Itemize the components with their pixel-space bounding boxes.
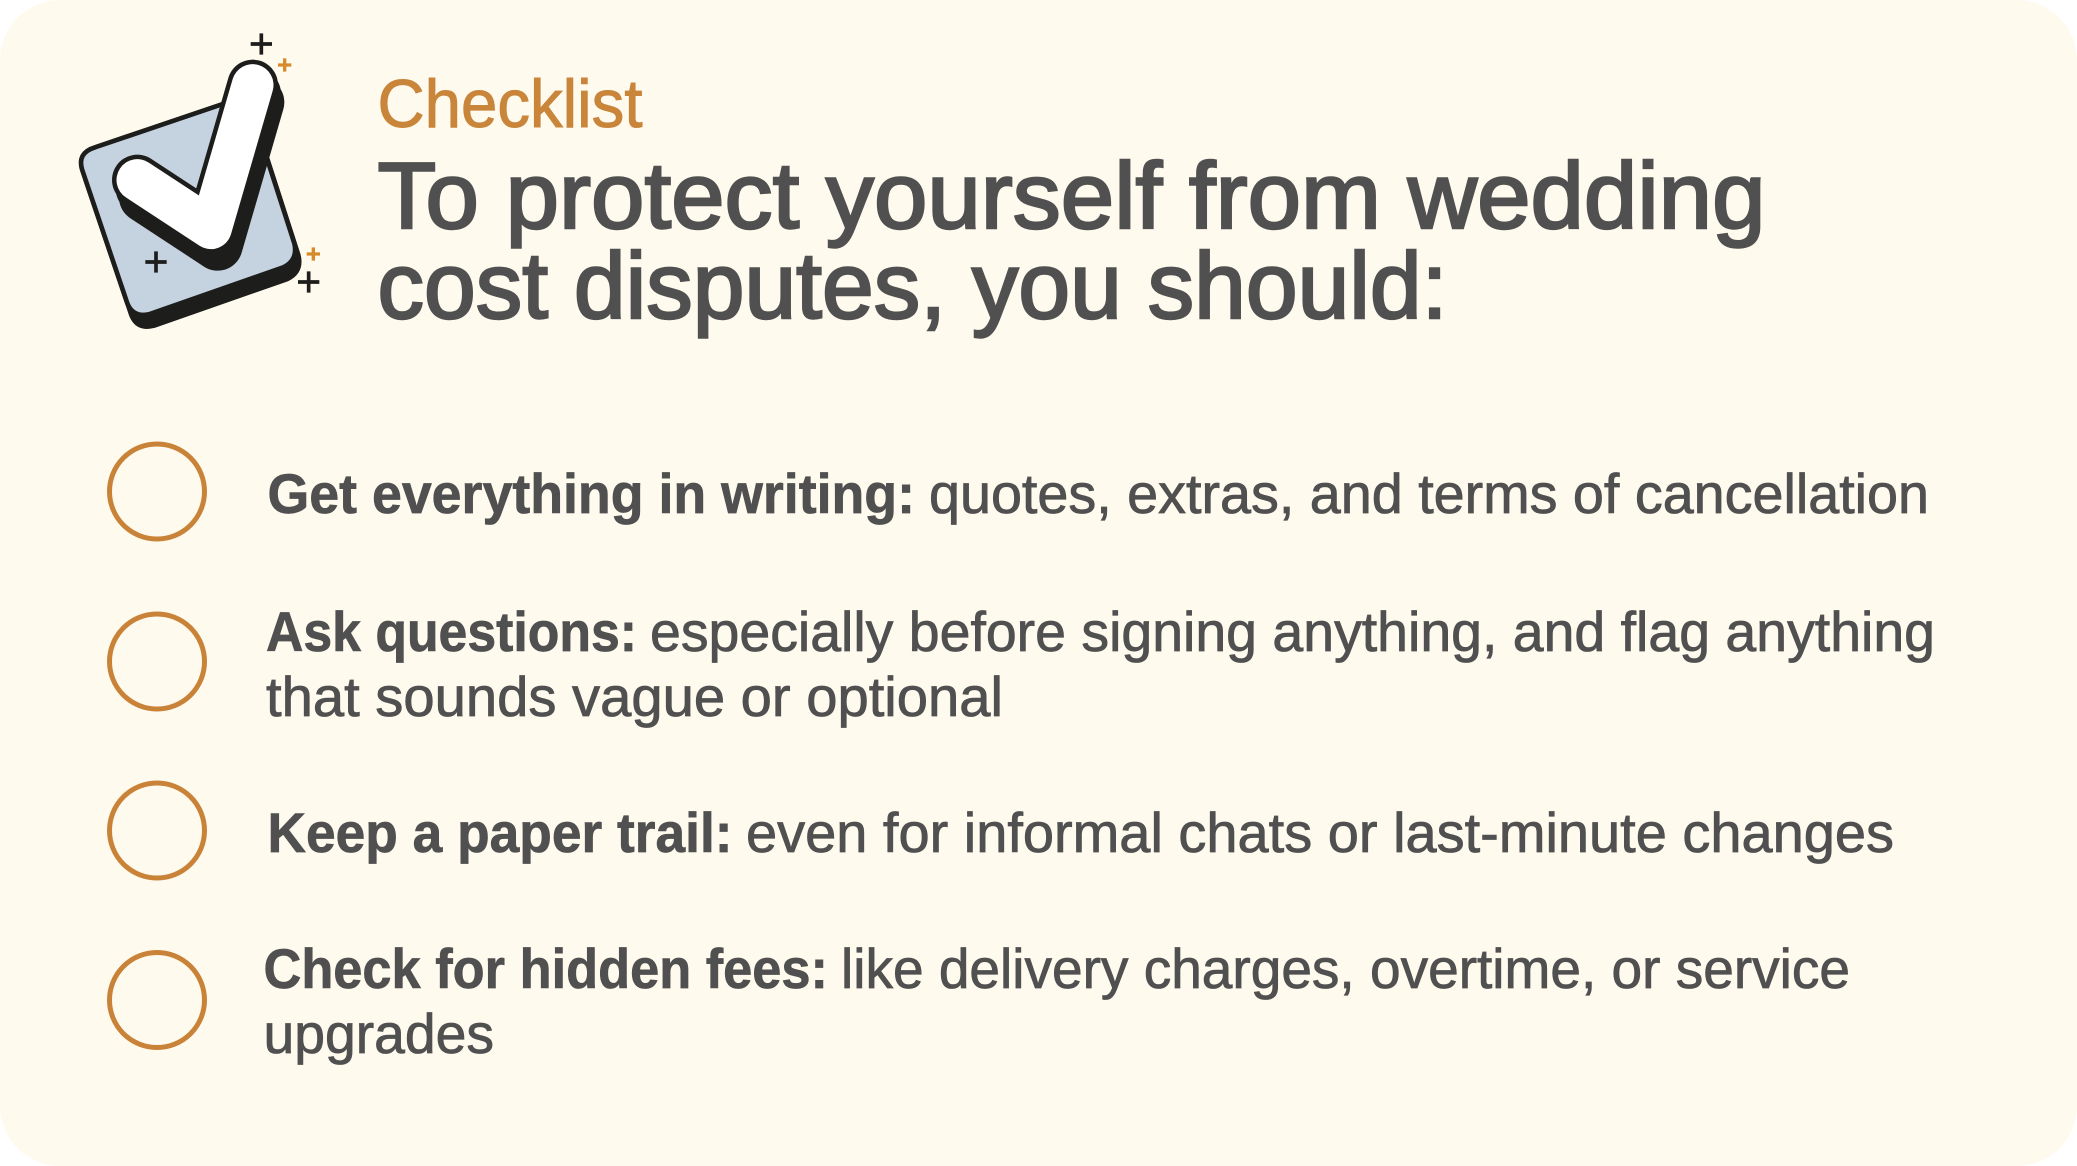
item 2 text (266, 600, 1935, 728)
item 1 text: Get everything in writing: (268, 462, 915, 525)
checkbox 4 (110, 952, 204, 1048)
heading: To protect yourself from wedding (378, 143, 1766, 248)
item 4 text: like delivery charges, overtime, or service (841, 937, 1850, 1000)
item 2 text: Ask questions: (266, 600, 637, 663)
item 3 text: even for informal chats or last-minute changes (746, 801, 1894, 864)
item 2 text: that sounds vague or optional (266, 665, 1003, 728)
icon: tilted checkbox with check mark (81, 33, 320, 327)
heading: cost disputes, you should: (378, 233, 1448, 338)
item 4 text (264, 937, 1850, 1065)
item 1 text: quotes, extras, and terms of cancellation (929, 462, 1929, 525)
item 2 text: especially before signing anything, and flag anything (650, 600, 1935, 663)
checkbox 3 (110, 783, 204, 878)
checkbox 2 (110, 614, 204, 709)
label: Checklist: Checklist (378, 66, 643, 142)
item 3 text: Keep a paper trail: (268, 801, 732, 864)
item 4 text: upgrades (264, 1002, 494, 1065)
heading (378, 143, 1766, 338)
item 4 text: Check for hidden fees: (264, 937, 828, 1000)
checkbox 1 (110, 444, 204, 539)
item 1 text (268, 462, 1929, 525)
